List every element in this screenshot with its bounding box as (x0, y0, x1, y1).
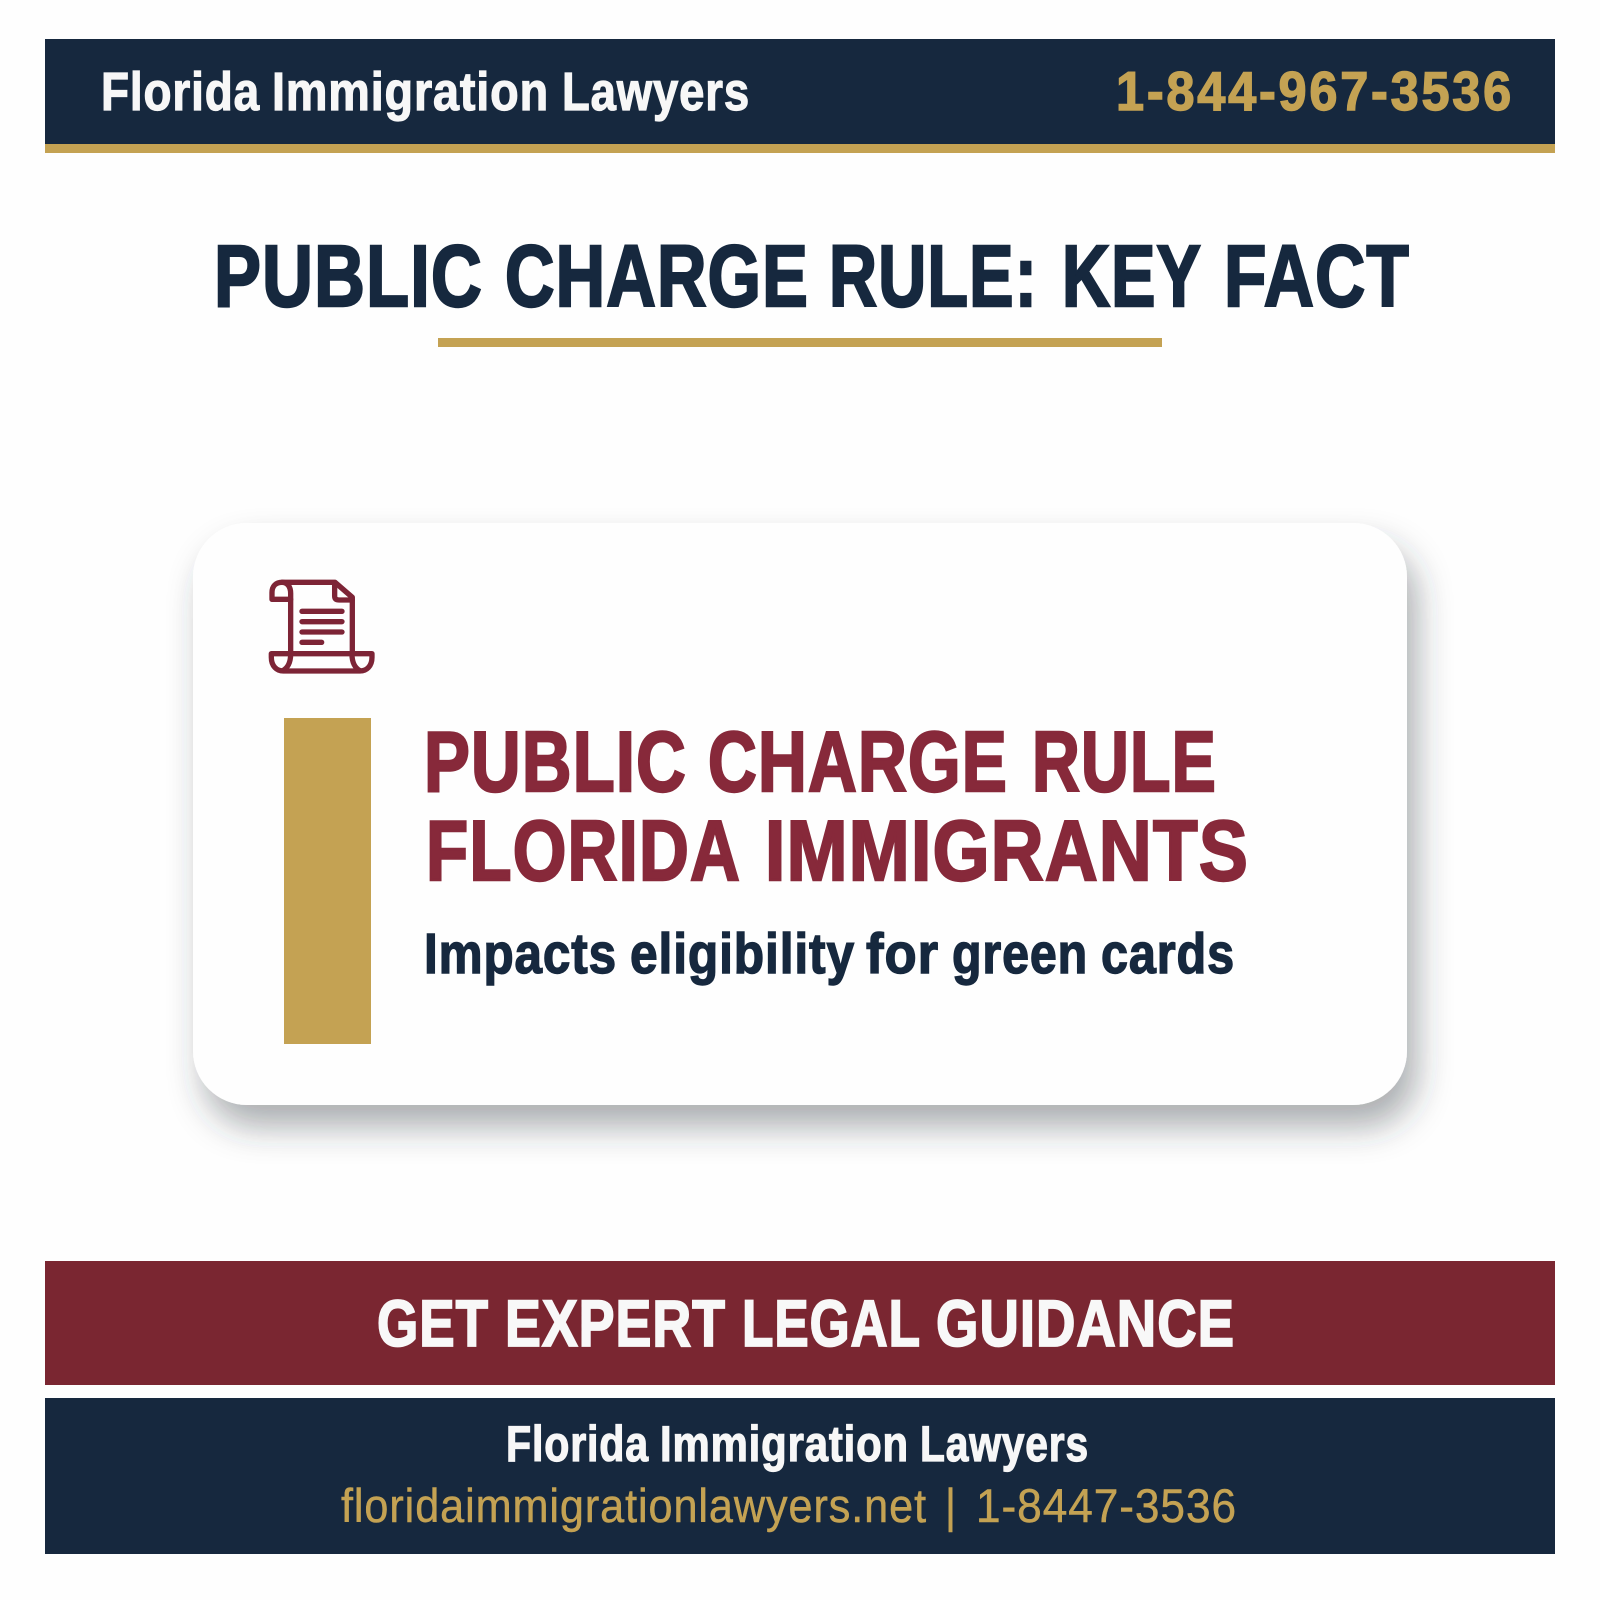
card subtext: for (866, 922, 939, 986)
footer website and phone: | (945, 1479, 956, 1532)
card headline (424, 715, 1249, 899)
call to action banner: GET (377, 1286, 489, 1360)
card subtext (424, 922, 1235, 986)
page title: CHARGE (505, 228, 809, 325)
call to action banner (45, 1261, 1555, 1385)
page title: PUBLIC (214, 228, 483, 325)
top header bar (45, 39, 1555, 153)
firm name (101, 62, 750, 122)
page title: RULE: (829, 228, 1038, 325)
footer contact bar (45, 1398, 1555, 1554)
footer firm name: Immigration (660, 1416, 909, 1472)
card headline: IMMIGRANTS (765, 804, 1249, 899)
firm name: Lawyers (562, 62, 750, 122)
card headline: CHARGE (708, 715, 1008, 810)
card subtext: eligibility (630, 922, 855, 986)
firm name: Immigration (272, 62, 549, 122)
call to action banner: GUIDANCE (936, 1286, 1235, 1360)
card headline: PUBLIC (424, 715, 687, 810)
page title (214, 228, 1410, 347)
icon: legal scroll document (271, 582, 372, 671)
card subtext: green (952, 922, 1088, 986)
panel: key fact card (193, 523, 1407, 1105)
call to action banner: EXPERT (505, 1286, 726, 1360)
card headline: FLORIDA (426, 804, 741, 899)
footer firm name (506, 1416, 1089, 1472)
footer firm name: Florida (506, 1416, 649, 1472)
footer website and phone: floridaimmigrationlawyers.net (341, 1479, 927, 1532)
page title: FACT (1224, 228, 1410, 325)
footer firm name: Lawyers (920, 1416, 1089, 1472)
footer website and phone: 1-8447-3536 (976, 1479, 1237, 1532)
phone number: 1-844-967-3536 (1116, 60, 1514, 122)
firm name: Florida (101, 62, 260, 122)
gold accent bar (284, 718, 371, 1044)
card subtext: Impacts (424, 922, 617, 986)
card subtext: cards (1101, 922, 1235, 986)
call to action banner: LEGAL (742, 1286, 921, 1360)
card headline: RULE (1032, 715, 1217, 810)
page title: KEY (1062, 228, 1202, 325)
